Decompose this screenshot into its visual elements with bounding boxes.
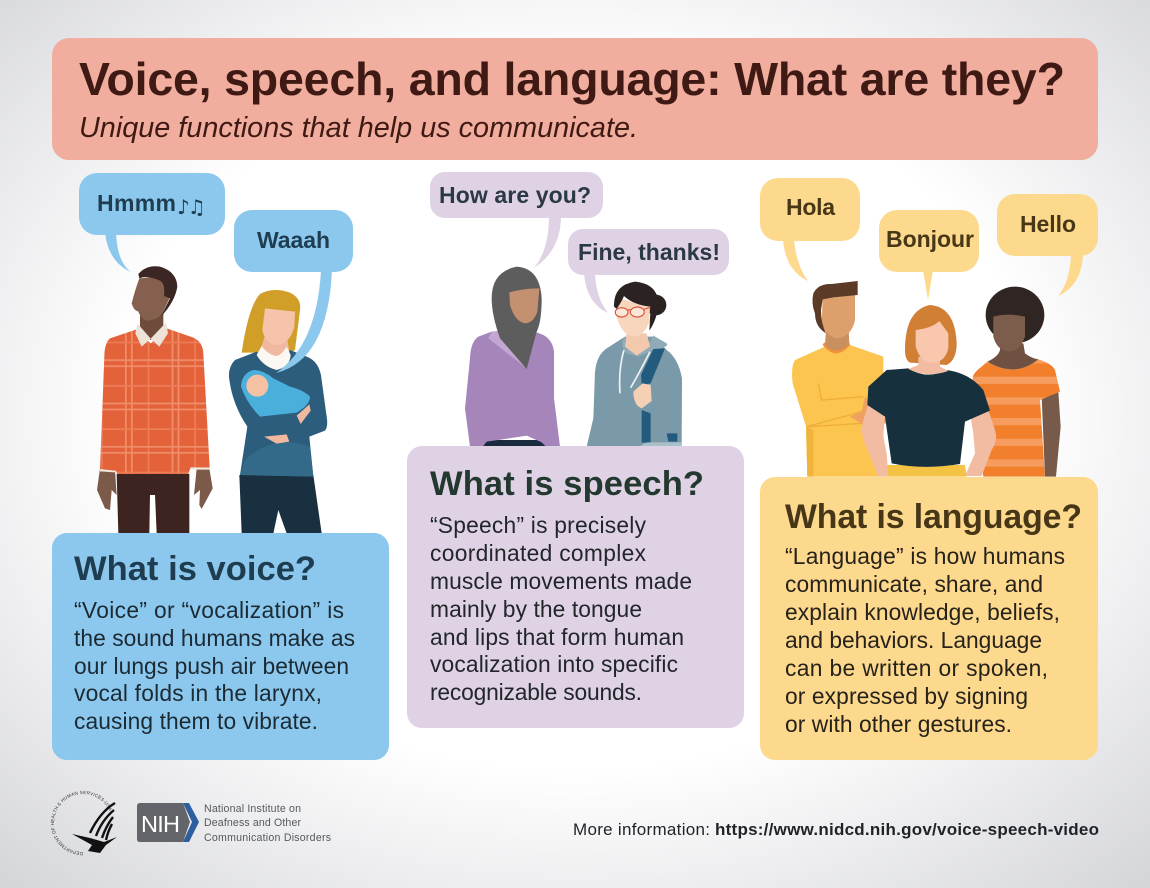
panel: language <box>760 178 1098 760</box>
logo: NIH: NIH <box>141 811 180 837</box>
illustration: man humming <box>97 266 213 533</box>
speech bubble: Hola: Hola <box>786 194 835 220</box>
organization name: Communication Disorders <box>204 832 331 844</box>
illustration: woman in hijab <box>465 267 560 447</box>
header banner <box>52 38 1098 160</box>
card: what is speech: coordinated complex <box>430 540 647 566</box>
card: what is language: communicate, share, and <box>785 571 1043 597</box>
subtitle: Unique functions that help us communicate. <box>79 112 638 144</box>
title: Voice, speech, and language: What are they? <box>79 53 1065 105</box>
speech bubble: Bonjour: Bonjour <box>886 226 974 252</box>
card: what is language: “Language” is how humans <box>785 543 1065 569</box>
card: what is voice: causing them to vibrate. <box>74 708 318 734</box>
illustration: woman with afro <box>973 287 1061 477</box>
organization name: National Institute on <box>204 803 301 815</box>
more information link: https://www.nidcd.nih.gov/voice-speech-video <box>715 820 1099 839</box>
speech bubble: Hmmm <box>79 173 225 272</box>
speech bubble: Hello: Hello <box>1020 211 1076 237</box>
card: what is speech: What is speech? <box>430 465 704 503</box>
card: what is voice: the sound humans make as <box>74 625 355 651</box>
card: what is voice <box>52 533 389 760</box>
card: what is speech <box>407 446 744 728</box>
illustration: woman in hoodie <box>587 282 682 447</box>
card: what is language: or expressed by signing <box>785 683 1028 709</box>
card: what is speech: muscle movements made <box>430 568 692 594</box>
card: what is voice: vocal folds in the larynx, <box>74 680 322 706</box>
speech bubble: Waaah: Waaah <box>257 227 330 253</box>
speech bubble: Fine, thanks <box>568 229 729 313</box>
card: what is speech: and lips that form human <box>430 624 684 650</box>
card: what is language: or with other gestures. <box>785 711 1012 737</box>
card: what is language: and behaviors. Language <box>785 627 1042 653</box>
illustration: man in yellow shirt <box>792 281 890 477</box>
speech bubble: How are you <box>430 172 603 268</box>
speech bubble: Fine, thanks: Fine, thanks! <box>578 239 720 265</box>
card: what is voice: What is voice? <box>74 550 316 588</box>
logo: HHS seal: DEPARTMENT OF HEALTH & HUMAN SERVICES·USA <box>50 790 112 856</box>
illustration: woman with red hair <box>862 305 996 477</box>
more information link: More information: <box>573 820 710 839</box>
card: what is voice: “Voice” or “vocalization” is <box>74 597 344 623</box>
speech bubble: Hmmm: ♪♫ <box>177 195 204 219</box>
speech bubble: Waaah <box>234 210 353 373</box>
card: what is language <box>760 477 1098 760</box>
organization name: Deafness and Other <box>204 817 301 829</box>
illustration: woman with baby <box>229 290 327 533</box>
speech bubble: How are you: How are you? <box>439 182 591 208</box>
card: what is speech: mainly by the tongue <box>430 596 642 622</box>
logo: NIH <box>137 803 199 842</box>
card: what is speech: “Speech” is precisely <box>430 512 647 538</box>
card: what is language: can be written or spoken, <box>785 655 1048 681</box>
card: what is speech: recognizable sounds. <box>430 679 642 705</box>
panel: voice <box>52 173 389 760</box>
card: what is language: explain knowledge, beliefs, <box>785 599 1060 625</box>
card: what is voice: our lungs push air between <box>74 653 349 679</box>
card: what is speech: vocalization into specific <box>430 651 678 677</box>
organization name <box>204 803 331 844</box>
panel: speech <box>407 172 744 728</box>
speech bubble: Bonjour <box>879 210 979 300</box>
speech bubble: Hmmm: Hmmm <box>97 190 176 216</box>
card: what is language: What is language? <box>785 498 1082 536</box>
speech bubble: Hola <box>760 178 860 281</box>
speech bubble: Hello <box>997 194 1098 296</box>
